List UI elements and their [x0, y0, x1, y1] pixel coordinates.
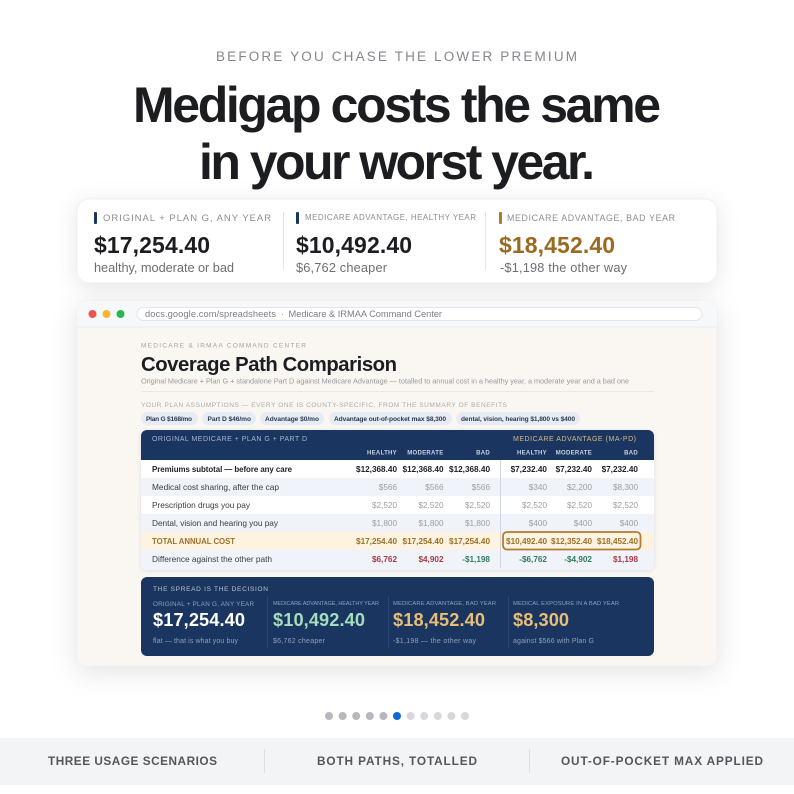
row: difference against the other path: -$1,198 [462, 555, 490, 564]
row: prescription drugs: $2,520 [567, 501, 592, 510]
row: prescription drugs [152, 500, 638, 510]
row: medical cost sharing: $566 [425, 483, 444, 492]
summary: original plus Plan G: healthy, moderate or bad [94, 260, 234, 275]
row: medical cost sharing: Medical cost sharing, after the cap [152, 482, 279, 492]
main title [133, 77, 661, 190]
sheet header: Original Medicare + Plan G + standalone Part D against Medicare Advantage — totalled to annual cost in a healthy year, a moderate year and a bad one [141, 376, 629, 386]
row: dental, vision and hearing [152, 518, 638, 528]
panel: headline cost summary card [77, 199, 717, 283]
table group headers: HEALTHY [367, 450, 397, 456]
row: premiums subtotal: $7,232.40 [556, 465, 592, 474]
plan assumptions chips: Plan G $168/mo [146, 416, 192, 423]
spread: original plus Plan G: ORIGINAL + PLAN G, ANY YEAR [153, 601, 254, 608]
row: difference against the other path: $1,198 [613, 555, 638, 564]
spread: Medicare Advantage healthy year [273, 601, 379, 645]
row: premiums subtotal: $12,368.40 [449, 465, 490, 474]
row: medical cost sharing: $8,300 [613, 483, 638, 492]
plan assumptions chips: Advantage $0/mo [265, 416, 319, 423]
spread: original plus Plan G: $17,254.40 [153, 610, 245, 630]
comparison table [141, 430, 654, 570]
summary: Medicare Advantage healthy year: MEDICARE ADVANTAGE, HEALTHY YEAR [305, 213, 476, 222]
row: total annual cost [152, 537, 638, 546]
summary: original plus Plan G: $17,254.40 [94, 232, 210, 258]
table group headers: ORIGINAL MEDICARE + PLAN G + PART D [152, 436, 307, 443]
plan assumptions chips [141, 402, 580, 425]
spread: Medicare Advantage bad year: -$1,198 — the other way [393, 638, 476, 645]
table group headers: MODERATE [556, 450, 592, 456]
row: total annual cost: $17,254.40 [449, 537, 490, 546]
row: total annual cost: $17,254.40 [403, 537, 444, 546]
row: premiums subtotal: $7,232.40 [602, 465, 638, 474]
summary: Medicare Advantage bad year: $18,452.40 [499, 232, 615, 258]
plan assumptions chips: Advantage out-of-pocket max $8,300 [334, 416, 446, 423]
summary: Medicare Advantage healthy year: $6,762 cheaper [296, 260, 388, 275]
footer band [0, 738, 794, 785]
row: medical cost sharing: $566 [472, 483, 490, 492]
row: dental, vision and hearing: $1,800 [372, 519, 397, 528]
browser toolbar: Medicare & IRMAA Command Center [288, 309, 442, 319]
pagination dots [325, 712, 469, 720]
summary: Medicare Advantage bad year: -$1,198 the other way [500, 260, 628, 275]
row: medical cost sharing: $2,200 [567, 483, 592, 492]
panel: the spread is the decision [141, 577, 654, 656]
spread: original plus Plan G: flat — that is what you buy [153, 638, 238, 645]
row: premiums subtotal [152, 465, 638, 474]
footer band: OUT-OF-POCKET MAX APPLIED [561, 754, 763, 768]
summary: Medicare Advantage bad year [499, 212, 675, 275]
eyebrow heading: BEFORE YOU CHASE THE LOWER PREMIUM [216, 49, 577, 64]
row: dental, vision and hearing: $400 [529, 519, 547, 528]
plan assumptions chips: Part D $46/mo [208, 416, 251, 423]
panel: the spread is the decision: THE SPREAD IS THE DECISION [153, 586, 268, 593]
row: total annual cost: $17,254.40 [356, 537, 397, 546]
table group headers: BAD [624, 450, 638, 456]
row: total annual cost: $18,452.40 [597, 537, 638, 546]
row: premiums subtotal: $12,368.40 [403, 465, 444, 474]
row: difference against the other path [152, 554, 638, 564]
spread: Medicare Advantage healthy year: $10,492.40 [273, 610, 365, 630]
summary: original plus Plan G: ORIGINAL + PLAN G, ANY YEAR [103, 213, 271, 224]
spread: Medicare Advantage bad year: MEDICARE ADVANTAGE, BAD YEAR [393, 601, 496, 607]
panel: browser window [77, 301, 717, 666]
main title: Medigap costs the same [133, 77, 661, 133]
row: prescription drugs: $2,520 [372, 501, 397, 510]
row: dental, vision and hearing: $1,800 [465, 519, 490, 528]
row: dental, vision and hearing: Dental, vision and hearing you pay [152, 518, 279, 528]
table group headers: MODERATE [407, 450, 444, 456]
row: medical cost sharing: $566 [379, 483, 397, 492]
sheet header [141, 342, 654, 392]
spread: Medicare Advantage healthy year: MEDICARE ADVANTAGE, HEALTHY YEAR [273, 601, 379, 607]
spread: Medicare Advantage healthy year: $6,762 cheaper [273, 638, 326, 645]
row: difference against the other path: $6,762 [372, 555, 397, 564]
row: prescription drugs: $2,520 [465, 501, 490, 510]
spread: Medicare Advantage bad year: $18,452.40 [393, 610, 485, 630]
row: medical cost sharing: $340 [529, 483, 547, 492]
main title: in your worst year. [199, 134, 595, 190]
summary: Medicare Advantage bad year: MEDICARE ADVANTAGE, BAD YEAR [507, 213, 675, 223]
row: dental, vision and hearing: $400 [574, 519, 592, 528]
sheet header: MEDICARE & IRMAA COMMAND CENTER [141, 342, 306, 350]
row: dental, vision and hearing: $1,800 [418, 519, 444, 528]
spread: medical exposure in a bad year: against $566 with Plan G [513, 638, 594, 645]
summary: original plus Plan G [94, 212, 271, 275]
row: prescription drugs: $2,520 [418, 501, 444, 510]
row: total annual cost: TOTAL ANNUAL COST [152, 537, 235, 546]
row: premiums subtotal: $12,368.40 [356, 465, 397, 474]
table group headers: BAD [476, 450, 490, 456]
table group headers [152, 436, 638, 456]
sheet header: Coverage Path Comparison [141, 354, 397, 376]
summary: Medicare Advantage healthy year: $10,492.40 [296, 232, 412, 258]
spread: original plus Plan G [153, 601, 254, 645]
browser toolbar: · [281, 309, 284, 319]
row: prescription drugs: $2,520 [613, 501, 638, 510]
row: total annual cost: $12,352.40 [551, 537, 592, 546]
footer band: THREE USAGE SCENARIOS [48, 754, 217, 768]
spread: medical exposure in a bad year: $8,300 [513, 610, 569, 630]
summary: Medicare Advantage healthy year [296, 212, 476, 275]
spread: Medicare Advantage bad year [393, 601, 496, 645]
row: medical cost sharing [152, 482, 638, 492]
row: difference against the other path: -$4,902 [564, 555, 592, 564]
row: difference against the other path: $4,902 [418, 555, 444, 564]
browser toolbar: docs.google.com/spreadsheets [145, 309, 276, 319]
spread: medical exposure in a bad year [513, 601, 619, 645]
spread: medical exposure in a bad year: MEDICAL EXPOSURE IN A BAD YEAR [513, 601, 619, 607]
row: prescription drugs: $2,520 [522, 501, 547, 510]
plan assumptions chips: YOUR PLAN ASSUMPTIONS — EVERY ONE IS COUNTY-SPECIFIC, FROM THE SUMMARY OF BENEFITS [141, 402, 508, 409]
table group headers: MEDICARE ADVANTAGE (MA-PD) [513, 436, 636, 443]
highlight box around Medicare Advantage totals [503, 532, 640, 550]
row: prescription drugs: Prescription drugs you pay [152, 500, 251, 510]
row: difference against the other path: -$6,762 [519, 555, 547, 564]
row: difference against the other path: Difference against the other path [152, 554, 272, 564]
footer band: BOTH PATHS, TOTALLED [317, 754, 477, 768]
table group headers: HEALTHY [517, 450, 547, 456]
row: total annual cost: $10,492.40 [506, 537, 547, 546]
row: premiums subtotal: $7,232.40 [511, 465, 547, 474]
plan assumptions chips: dental, vision, hearing $1,800 vs $400 [461, 416, 575, 423]
row: premiums subtotal: Premiums subtotal — before any care [152, 465, 293, 474]
row: dental, vision and hearing: $400 [620, 519, 638, 528]
browser toolbar [77, 301, 717, 328]
